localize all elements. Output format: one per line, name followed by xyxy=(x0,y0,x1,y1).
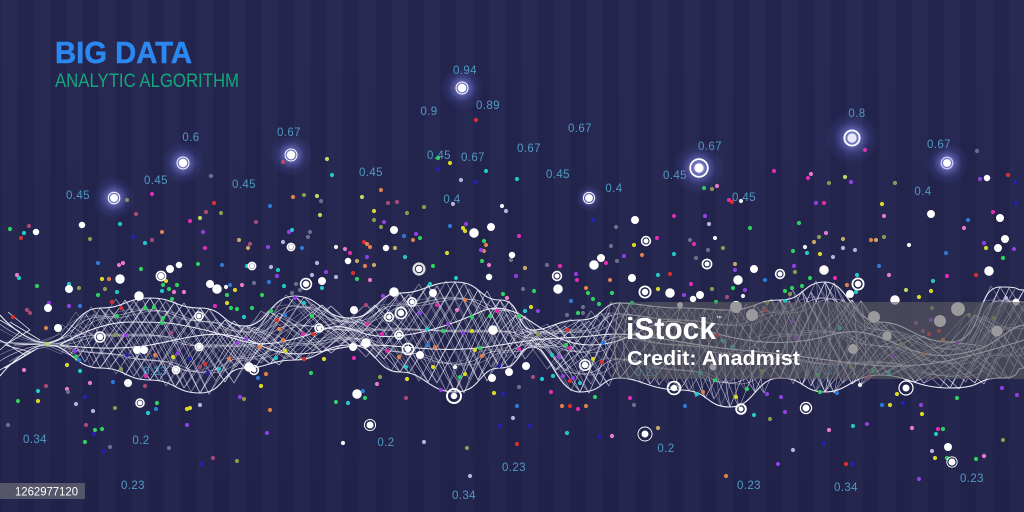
number labels: 0.8 xyxy=(848,108,866,120)
number labels: 0.23 xyxy=(143,366,167,378)
watermark credit: Credit: Anadmist xyxy=(627,348,800,370)
number labels: 0.23 xyxy=(960,473,984,485)
number labels: 0.45 xyxy=(546,169,570,181)
number labels: 0.67 xyxy=(517,143,541,155)
number labels: 0.34 xyxy=(23,434,47,446)
wireframe data wave mesh xyxy=(0,281,1024,408)
number labels: 0.23 xyxy=(502,462,526,474)
scattered colored data points xyxy=(8,120,1017,479)
watermark logo: iStock xyxy=(626,311,717,346)
number labels: 0.23 xyxy=(737,480,761,492)
glowing node: 0.6 xyxy=(161,141,205,185)
number labels: 0.45 xyxy=(144,175,168,187)
image id badge: 1262977120 xyxy=(15,484,78,498)
glowing node: 0.94 xyxy=(440,66,484,110)
number labels: 0.45 xyxy=(732,192,756,204)
number labels: 0.2 xyxy=(132,435,150,447)
number labels: 0.2 xyxy=(657,443,675,455)
number labels: 0.45 xyxy=(427,150,451,162)
image id badge xyxy=(0,483,85,499)
number labels: 0.45 xyxy=(663,170,687,182)
glowing node: 0.45 left xyxy=(92,176,136,220)
number labels: 0.67 xyxy=(698,141,722,153)
number labels: 0.2 xyxy=(377,437,395,449)
number labels: 0.67 xyxy=(927,139,951,151)
number labels: 0.34 xyxy=(834,482,858,494)
number labels: 0.6 xyxy=(182,132,200,144)
number labels: 0.94 xyxy=(453,65,477,77)
number labels: 0.23 xyxy=(816,365,840,377)
number labels: 0.23 xyxy=(635,367,659,379)
number labels: 0.67 xyxy=(568,123,592,135)
number labels: 0.45 xyxy=(232,179,256,191)
title: BIG DATA xyxy=(55,35,192,70)
number labels: 0.23 xyxy=(121,480,145,492)
number labels: 0.4 xyxy=(443,194,461,206)
number labels: 0.45 xyxy=(66,190,90,202)
watermark band xyxy=(612,302,1024,379)
white markers under watermark band xyxy=(677,298,1020,370)
number labels: 0.9 xyxy=(420,106,438,118)
subtitle: ANALYTIC ALGORITHM xyxy=(55,71,239,92)
glowing node: 0.67 right, large xyxy=(672,141,726,195)
number labels: 0.89 xyxy=(476,100,500,112)
number labels: 0.67 xyxy=(461,152,485,164)
number labels: 0.4 xyxy=(605,183,623,195)
white data points xyxy=(36,178,1005,447)
number labels: 0.34 xyxy=(452,490,476,502)
glowing node: 0.67 far right xyxy=(925,141,969,185)
number labels: 0.4 xyxy=(914,186,932,198)
ring data markers xyxy=(95,237,957,467)
trademark: ™ xyxy=(716,315,722,322)
number labels: 0.67 xyxy=(277,127,301,139)
glowing node: 0.4 center xyxy=(575,184,603,212)
number labels: 0.45 xyxy=(359,167,383,179)
glowing node: 0.8 xyxy=(825,111,879,165)
glowing node: 0.67 left xyxy=(269,133,313,177)
